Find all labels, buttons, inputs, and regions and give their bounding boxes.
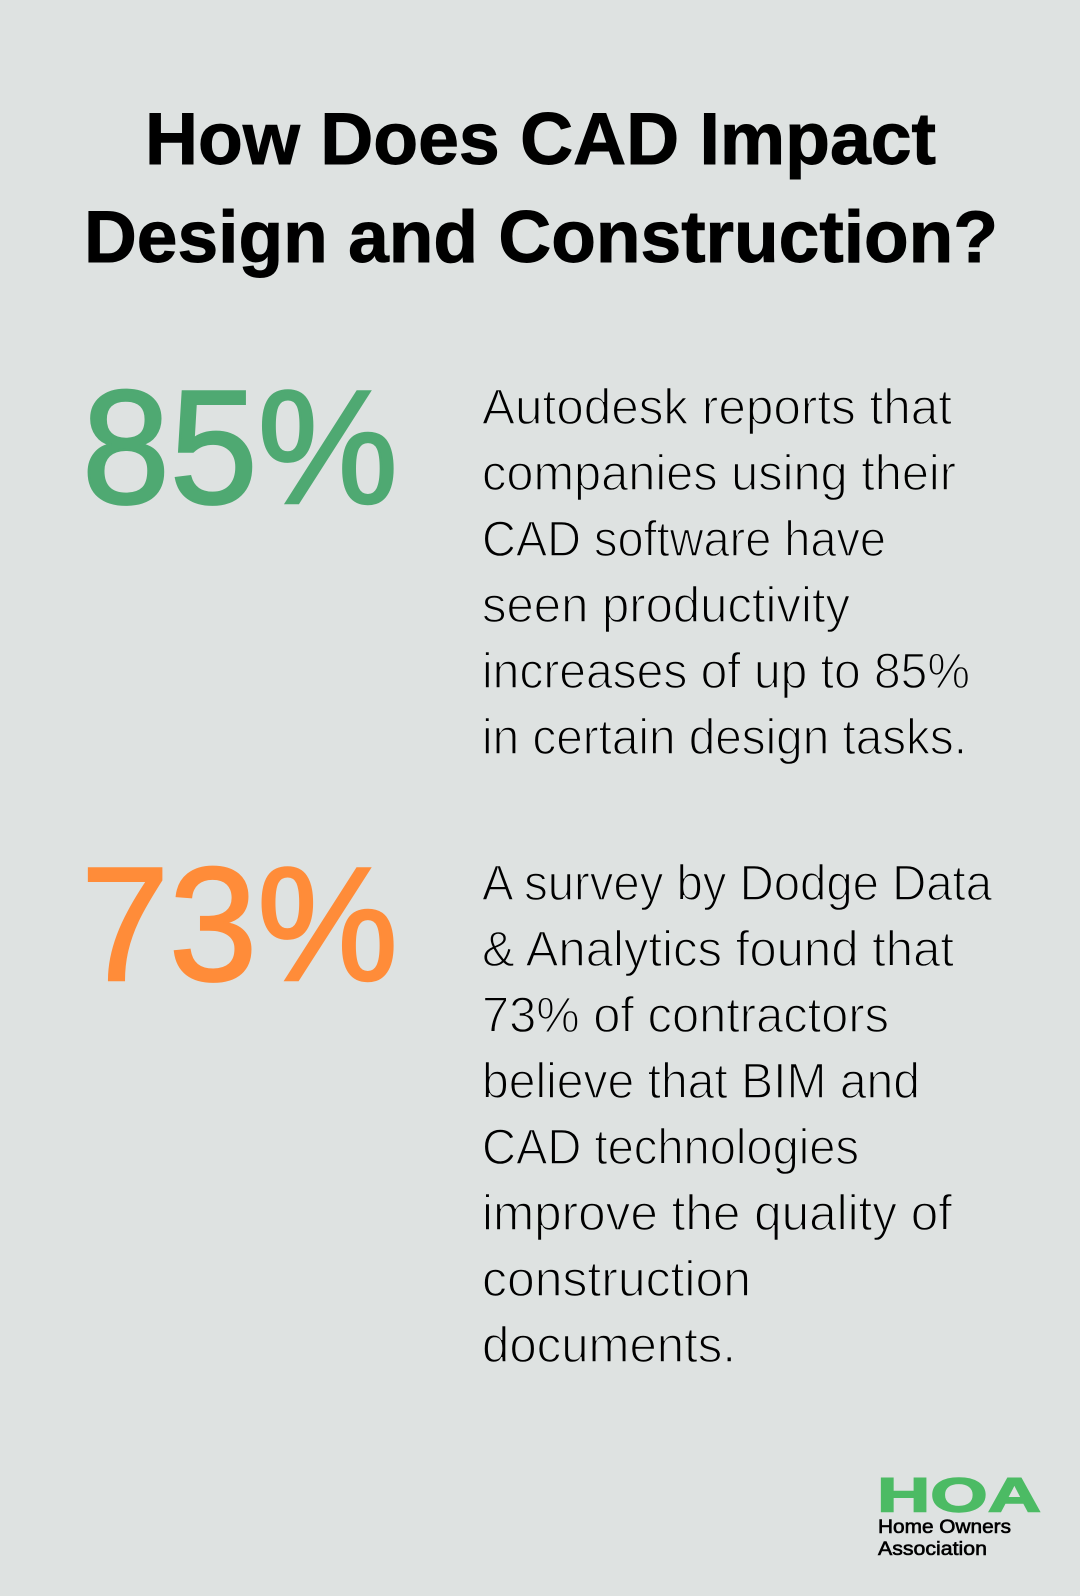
logo: HOA Home Owners Association: Home Owners: [878, 1517, 1011, 1538]
text block: Autodesk statistic: in certain design tasks.: [482, 709, 967, 765]
text block: Dodge Data statistic: [482, 855, 992, 1373]
logo: HOA Home Owners Association: HOA: [877, 1470, 1041, 1522]
title: How Does CAD Impact: [145, 99, 936, 180]
text block: Dodge Data statistic: CAD technologies: [482, 1119, 859, 1175]
text block: Dodge Data statistic: & Analytics found that: [482, 921, 954, 977]
text block: Autodesk statistic: CAD software have: [482, 511, 886, 567]
text block: Autodesk statistic: [482, 379, 970, 765]
text block: Autodesk statistic: seen productivity: [482, 577, 850, 633]
stat: 85%: 85%: [82, 357, 398, 538]
logo: HOA Home Owners Association: [877, 1470, 1041, 1560]
text block: Dodge Data statistic: documents.: [482, 1317, 736, 1373]
text block: Dodge Data statistic: construction: [482, 1251, 751, 1307]
text block: Dodge Data statistic: A survey by Dodge Data: [482, 855, 992, 911]
title: [84, 99, 998, 278]
title: Design and Construction?: [84, 197, 998, 278]
text block: Dodge Data statistic: believe that BIM and: [482, 1053, 920, 1109]
stat: 73%: 73%: [81, 834, 398, 1015]
text block: Dodge Data statistic: improve the quality of: [482, 1185, 952, 1241]
text block: Dodge Data statistic: 73% of contractors: [482, 987, 889, 1043]
text block: Autodesk statistic: companies using their: [482, 445, 956, 501]
text block: Autodesk statistic: increases of up to 85%: [482, 643, 970, 699]
logo: HOA Home Owners Association: Association: [878, 1539, 987, 1560]
text block: Autodesk statistic: Autodesk reports that: [482, 379, 952, 435]
